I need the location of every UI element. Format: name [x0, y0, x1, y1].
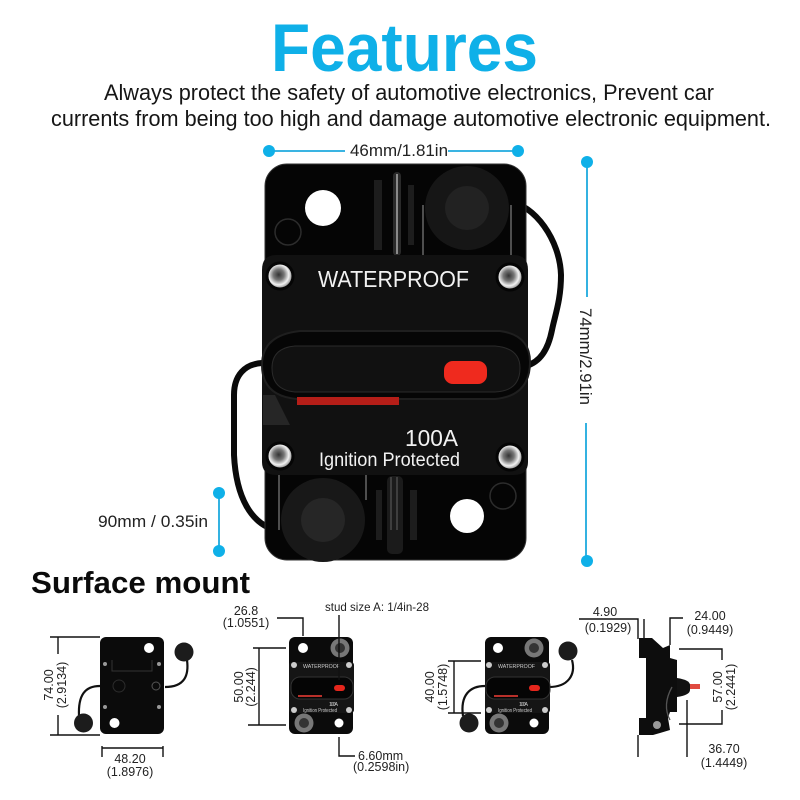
dimension 50.00: 50.00 — [232, 671, 246, 703]
terminal stud — [653, 721, 661, 729]
dimension 1.4449: (1.4449) — [701, 756, 747, 770]
toggle — [291, 677, 353, 699]
label WATERPROOF: WATERPROOF — [318, 266, 469, 292]
dimension 74.00: 74.00 — [42, 669, 56, 701]
dimension lines — [50, 637, 163, 757]
cover — [289, 662, 354, 713]
wire — [666, 687, 672, 720]
toggle — [486, 677, 550, 699]
red button — [444, 361, 487, 384]
mounting hole top — [305, 190, 341, 226]
stud spacing dimension: 90mm / 0.35in — [98, 487, 225, 557]
wires and caps — [460, 642, 578, 732]
dimension lines — [448, 661, 481, 713]
dimension 26.8: 26.8 — [234, 604, 258, 618]
intro text: Always protect the safety of automotive electronics, Prevent car — [104, 80, 714, 105]
labels: 100A — [519, 702, 528, 708]
holes and studs — [486, 638, 548, 732]
body — [485, 637, 549, 734]
cap top — [425, 166, 509, 250]
labels: Ignition Protected — [498, 708, 532, 714]
red bar — [494, 695, 518, 697]
base plate — [265, 164, 526, 560]
dimension 0.2598in: (0.2598in) — [353, 760, 409, 774]
stud size: stud size A: 1/4in-28 — [325, 600, 429, 614]
dimension 36.70: 36.70 — [708, 742, 740, 756]
dimension 4.90: 4.90 — [593, 605, 617, 619]
dimension 2.2441: (2.2441) — [724, 664, 738, 710]
dimension 0.9449: (0.9449) — [687, 623, 733, 637]
cap bottom — [281, 478, 365, 562]
toggle band — [262, 331, 530, 399]
toggle nub — [677, 678, 690, 697]
wire left — [234, 363, 280, 531]
dimension 6.60mm: 6.60mm — [358, 749, 403, 763]
stud spacing dimension: 90mm / 0.35in: 90mm / 0.35in — [98, 513, 208, 531]
main circuit breaker photo — [234, 164, 561, 562]
dimension 40.00: 40.00 — [423, 671, 437, 703]
label Ignition Protected: Ignition Protected — [319, 450, 460, 471]
dimension 57.00: 57.00 — [711, 671, 725, 703]
height dimension: 74mm/2.91in — [576, 156, 594, 567]
labels — [498, 664, 536, 714]
holes and screws — [103, 643, 161, 728]
red bar — [298, 695, 322, 697]
dimension 1.0551: (1.0551) — [223, 616, 269, 630]
dimension 24.00: 24.00 — [694, 609, 726, 623]
body — [289, 637, 353, 734]
labels: Ignition Protected — [303, 708, 337, 714]
wire right — [508, 201, 561, 366]
intro text — [51, 80, 771, 131]
dimension 0.1929: (0.1929) — [585, 621, 631, 635]
holes and studs — [291, 638, 352, 732]
diagram 1: rear view — [42, 637, 194, 779]
wires and caps — [74, 642, 194, 732]
screws — [267, 263, 523, 470]
red button — [529, 685, 540, 691]
height dimension: 74mm/2.91in: 74mm/2.91in — [576, 308, 594, 405]
title: Features — [271, 10, 538, 86]
diagram 4: side view — [579, 605, 747, 770]
width dimension: 46mm/1.81in — [263, 142, 524, 160]
intro text: currents from being too high and damage automotive electronic equipment. — [51, 106, 771, 131]
triangle notch — [263, 395, 290, 425]
red indicator bar — [297, 397, 399, 405]
dimension 48.20: 48.20 — [114, 752, 146, 766]
dimension lines — [248, 615, 355, 756]
red pin — [690, 684, 700, 689]
heading: Surface mount: Surface mount — [31, 565, 250, 600]
cover — [262, 255, 528, 475]
body — [100, 637, 164, 734]
dimension 2.244: (2.244) — [244, 667, 258, 707]
diagram 3: front view mounting spacing — [423, 637, 578, 734]
dimension 2.9134: (2.9134) — [55, 662, 69, 708]
labels: WATERPROOF — [303, 664, 341, 670]
side profile — [639, 638, 677, 735]
diagram 2: front view with stud size — [223, 600, 429, 774]
cover — [485, 662, 550, 713]
terminal marks — [374, 180, 417, 540]
labels — [303, 664, 341, 714]
plate details — [275, 205, 516, 530]
labels: 100A — [329, 702, 338, 708]
dimension lines — [579, 618, 722, 757]
red button — [334, 685, 345, 691]
label 100A: 100A — [405, 425, 459, 451]
toggle inner — [272, 346, 520, 392]
width dimension: 46mm/1.81in: 46mm/1.81in — [350, 142, 448, 160]
dimension 1.5748: (1.5748) — [436, 664, 450, 710]
mounting hole bottom — [450, 499, 484, 533]
labels: WATERPROOF — [498, 664, 536, 670]
dimension 1.8976: (1.8976) — [107, 765, 153, 779]
